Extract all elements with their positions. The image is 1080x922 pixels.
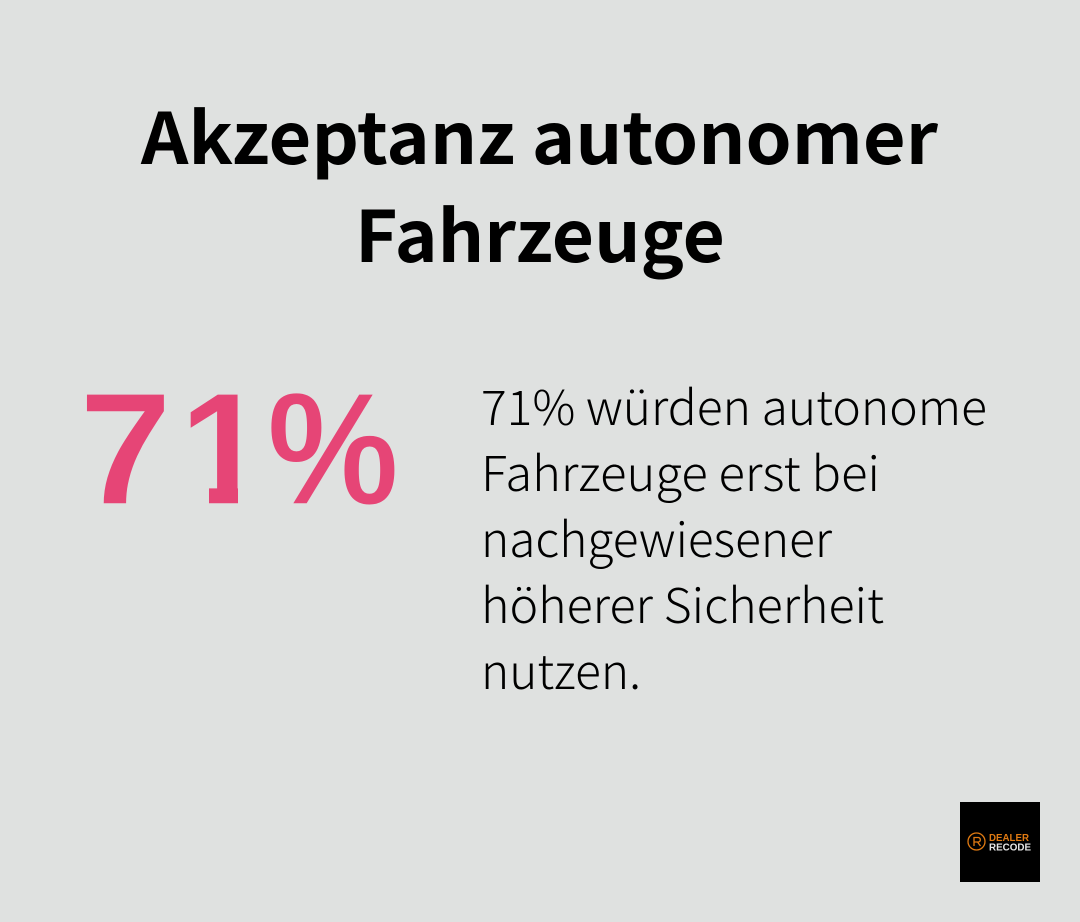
description text: 71% würden autonome [481, 369, 987, 439]
logo wordmark: DEALER [989, 833, 1030, 844]
big statistic: 71%: 7 [79, 359, 172, 538]
description text: Fahrzeuge erst bei [481, 435, 880, 505]
description text: nutzen. [481, 633, 641, 703]
logo wordmark [989, 833, 1031, 854]
big statistic: 71%: 1 [179, 359, 268, 538]
logo wordmark: RECODE [989, 842, 1031, 854]
description text [481, 369, 987, 703]
description text: nachgewiesener [481, 501, 833, 571]
logo: Dealer Recode [960, 802, 1040, 882]
title: Fahrzeuge [355, 181, 725, 283]
title: Akzeptanz autonomer [140, 83, 939, 185]
big statistic: 71%: % [267, 359, 399, 538]
big statistic: 71% [79, 359, 399, 538]
description text: höherer Sicherheit [481, 567, 884, 637]
title [140, 83, 939, 283]
icon: logo circle R [968, 833, 985, 850]
